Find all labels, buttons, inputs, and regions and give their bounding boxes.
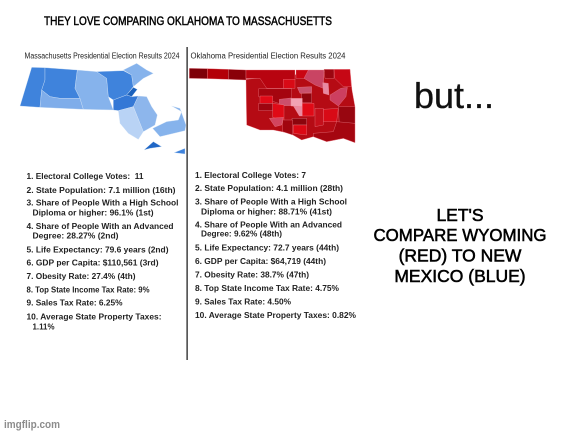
- stats list: Oklahoma: 7. Obesity Rate: 38.7% (47th): [195, 270, 309, 279]
- stats list: Massachusetts: Degree: 28.27% (2nd): [32, 231, 119, 240]
- text block: compare Wyoming to New Mexico: LET'S: [436, 205, 484, 225]
- stats list: Massachusetts: 5. Life Expectancy: 79.6 years (2nd): [26, 245, 169, 254]
- text block: compare Wyoming to New Mexico: (RED) TO NEW: [399, 246, 522, 266]
- stats list: Massachusetts: 6. GDP per Capita: $110,561 (3rd): [26, 259, 159, 268]
- Massachusetts map heading: Massachusetts Presidential Election Results 2024: [24, 52, 180, 60]
- stats list: Massachusetts: 4. Share of People With an Advanced: [26, 222, 174, 231]
- vertical divider: [186, 47, 188, 360]
- stats list: Massachusetts: 8. Top State Income Tax Rate: 9%: [26, 285, 150, 294]
- text block: compare Wyoming to New Mexico: [374, 205, 546, 286]
- stats list: Oklahoma: 5. Life Expectancy: 72.7 years (44th): [195, 243, 339, 252]
- title: THEY LOVE COMPARING OKLAHOMA TO MASSACHUSETTS: [44, 16, 332, 28]
- map panel: Massachusetts: [20, 52, 186, 154]
- stats list: Massachusetts: 1. Electoral College Votes: 11: [26, 172, 144, 181]
- stats list: Oklahoma: [195, 171, 356, 320]
- map panel: Oklahoma: [189, 52, 355, 143]
- stats list: Oklahoma: 1. Electoral College Votes: 7: [195, 171, 306, 180]
- text block: compare Wyoming to New Mexico: COMPARE WYOMING: [374, 225, 546, 245]
- Oklahoma county map: [189, 68, 355, 143]
- stats list: Massachusetts: Diploma or higher: 96.1% (1st): [32, 209, 154, 218]
- watermark: imgflip.com: [4, 419, 60, 431]
- Oklahoma map heading: Oklahoma Presidential Election Results 2024: [190, 52, 346, 60]
- stats list: Massachusetts: [26, 172, 178, 332]
- stats list: Massachusetts: 9. Sales Tax Rate: 6.25%: [26, 299, 123, 308]
- stats list: Massachusetts: 7. Obesity Rate: 27.4% (4th): [26, 272, 136, 281]
- stats list: Oklahoma: Degree: 9.62% (48th): [201, 230, 282, 239]
- stats list: Oklahoma: 4. Share of People With an Advanced: [195, 220, 342, 229]
- stats list: Oklahoma: 8. Top State Income Tax Rate: 4.75%: [195, 284, 339, 293]
- stats list: Oklahoma: 10. Average State Property Taxes: 0.82%: [195, 311, 356, 320]
- stats list: Oklahoma: 6. GDP per Capita: $64,719 (44th): [195, 257, 326, 266]
- stats list: Massachusetts: 1.11%: [32, 323, 55, 332]
- stats list: Oklahoma: 2. State Population: 4.1 million (28th): [195, 184, 343, 193]
- Massachusetts county map: [20, 63, 186, 154]
- text block: compare Wyoming to New Mexico: MEXICO (BLUE): [394, 266, 526, 286]
- stats list: Massachusetts: 3. Share of People With a High School: [26, 199, 178, 208]
- stats list: Massachusetts: 10. Average State Property Taxes:: [26, 313, 162, 322]
- stats list: Oklahoma: 9. Sales Tax Rate: 4.50%: [195, 297, 291, 306]
- stats list: Oklahoma: 3. Share of People With a High School: [195, 197, 347, 206]
- stats list: Massachusetts: 2. State Population: 7.1 million (16th): [26, 186, 176, 195]
- heading: but...: but...: [414, 75, 494, 116]
- stats list: Oklahoma: Diploma or higher: 88.71% (41st): [201, 207, 332, 216]
